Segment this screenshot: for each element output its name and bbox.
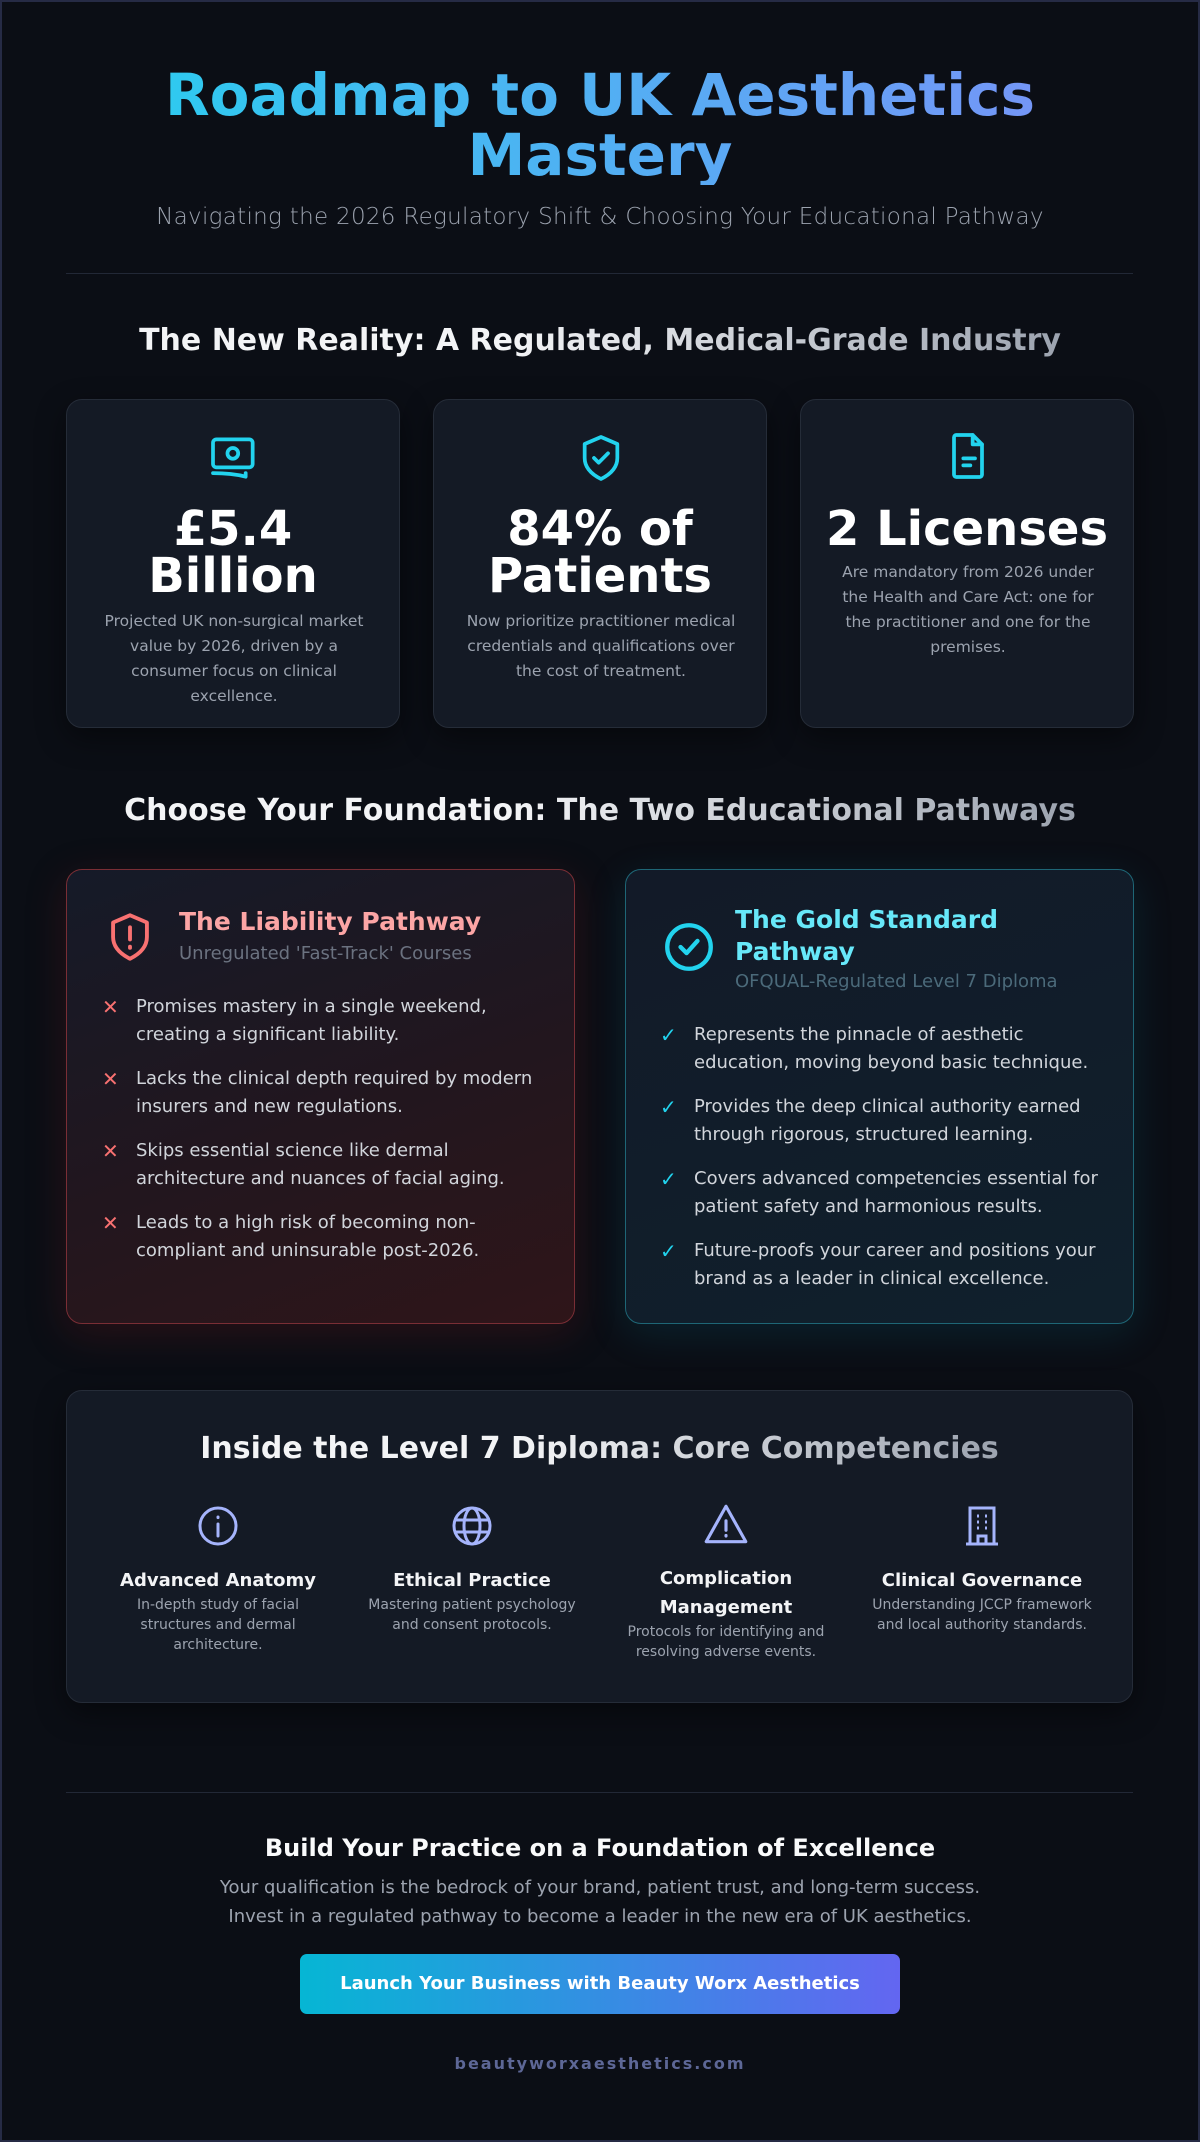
- list: liability points: Lacks the clinical depth required by modern insurers and new regulations.: [136, 1068, 532, 1117]
- list: liability points: ✕: [102, 1211, 119, 1235]
- list: gold points: Future-proofs your career and positions your brand as a leader in clinical excellence.: [694, 1240, 1096, 1289]
- competency: complications: Protocols for identifying and resolving adverse events.: [628, 1624, 824, 1660]
- panel: gold standard pathway: [625, 869, 1134, 1324]
- button: cta: Launch Your Business with Beauty Worx Aesthetics: [340, 1973, 860, 1994]
- stat: 2 licenses: 2 Licenses: [826, 501, 1108, 557]
- list: gold points: ✓: [660, 1095, 677, 1119]
- heading: gold standard: Pathway: [735, 937, 855, 966]
- list: gold points: ✓: [660, 1023, 677, 1047]
- text: market desc: Projected UK non-surgical market value by 2026, driven by a consumer focus on clinical excellence.: [105, 612, 363, 705]
- panel: patients stat: [433, 399, 767, 728]
- competency: complications: [628, 1504, 824, 1660]
- stat: 84%: [488, 501, 712, 604]
- text: liability sub: Unregulated 'Fast-Track' Courses: [179, 943, 472, 964]
- icon: money: [211, 438, 255, 479]
- list: liability points: Promises mastery in a single weekend, creating a significant liability.: [136, 996, 487, 1045]
- subtitle: Navigating the 2026 Regulatory Shift & Choosing Your Educational Pathway: [156, 204, 1044, 230]
- stat: 84%: Patients: [488, 548, 712, 604]
- competency: complications: Management: [660, 1597, 792, 1618]
- list: gold points: [660, 1023, 1098, 1289]
- list: liability points: ✕: [102, 995, 119, 1019]
- competency: anatomy: Advanced Anatomy: [120, 1570, 316, 1591]
- list: liability points: [102, 995, 532, 1261]
- stat: 84%: 84% of: [507, 501, 693, 557]
- text: closing paragraph: [220, 1877, 980, 1927]
- competency: governance: [872, 1506, 1092, 1633]
- title: [0, 65, 1200, 185]
- list: gold points: ✓: [660, 1239, 677, 1263]
- competency: anatomy: [120, 1506, 316, 1653]
- title: Mastery: [468, 121, 732, 189]
- heading: liability: The Liability Pathway: [179, 907, 481, 936]
- title: Roadmap to UK Aesthetics: [165, 61, 1035, 129]
- icon: check circle: [665, 923, 713, 971]
- text: patients desc: Now prioritize practitioner medical credentials and qualifications over the cost of treatment.: [467, 612, 735, 680]
- heading: core competencies: Inside the Level 7 Diploma: Core Competencies: [200, 1431, 999, 1466]
- icon: document: [952, 433, 984, 479]
- panel: market stat: [66, 399, 400, 728]
- stat: 5.4 billion: £5.4: [174, 501, 292, 557]
- stat: 5.4 billion: Billion: [148, 548, 318, 604]
- panel: level 7 competencies: [66, 1390, 1133, 1703]
- panel: liability pathway: [66, 869, 575, 1324]
- text: licenses desc: Are mandatory from 2026 under the Health and Care Act: one for the practitioner and one for the premises.: [842, 563, 1094, 656]
- heading: two pathways: Choose Your Foundation: The Two Educational Pathways: [124, 793, 1076, 828]
- text: closing paragraph: Your qualification is the bedrock of your brand, patient trust, and long-term success.: [220, 1877, 980, 1898]
- list: gold points: Covers advanced competencies essential for patient safety and harmonious results.: [694, 1168, 1098, 1217]
- icon: shield alert: [111, 913, 149, 961]
- heading: gold standard: [735, 905, 998, 966]
- text: website: beautyworxaesthetics.com: [454, 2054, 745, 2073]
- list: liability points: Skips essential science like dermal architecture and nuances of facial aging.: [136, 1140, 505, 1189]
- icon: warning: [704, 1504, 748, 1544]
- icon: info: [198, 1506, 238, 1546]
- heading: gold standard: The Gold Standard: [735, 905, 998, 934]
- list: liability points: Leads to a high risk of becoming non-compliant and uninsurable post-2026.: [136, 1212, 479, 1261]
- competency: anatomy: In-depth study of facial structures and dermal architecture.: [137, 1597, 299, 1653]
- button: cta: [300, 1954, 900, 2014]
- competency: ethics: Mastering patient psychology and consent protocols.: [368, 1597, 576, 1633]
- competency: ethics: [368, 1506, 576, 1633]
- competency: governance: Clinical Governance: [882, 1570, 1082, 1591]
- list: liability points: ✕: [102, 1067, 119, 1091]
- text: gold sub: OFQUAL-Regulated Level 7 Diploma: [735, 971, 1058, 992]
- heading: build your practice: Build Your Practice on a Foundation of Excellence: [265, 1834, 935, 1862]
- competency: governance: Understanding JCCP framework and local authority standards.: [872, 1597, 1092, 1633]
- list: liability points: ✕: [102, 1139, 119, 1163]
- icon: building: [966, 1506, 998, 1546]
- list: gold points: Provides the deep clinical authority earned through rigorous, structured learning.: [694, 1096, 1081, 1145]
- stat: 5.4 billion: [148, 501, 318, 604]
- competency: ethics: Ethical Practice: [393, 1570, 551, 1591]
- list: gold points: Represents the pinnacle of aesthetic education, moving beyond basic technique.: [694, 1024, 1088, 1073]
- competency: complications: Complication: [660, 1568, 792, 1589]
- heading: new reality: The New Reality: A Regulated, Medical-Grade Industry: [139, 323, 1061, 358]
- icon: globe: [452, 1506, 492, 1546]
- panel: licenses stat: [800, 399, 1134, 728]
- list: gold points: ✓: [660, 1167, 677, 1191]
- text: closing paragraph: Invest in a regulated pathway to become a leader in the new era of UK aesthetics.: [228, 1906, 972, 1927]
- icon: shield check: [582, 435, 620, 481]
